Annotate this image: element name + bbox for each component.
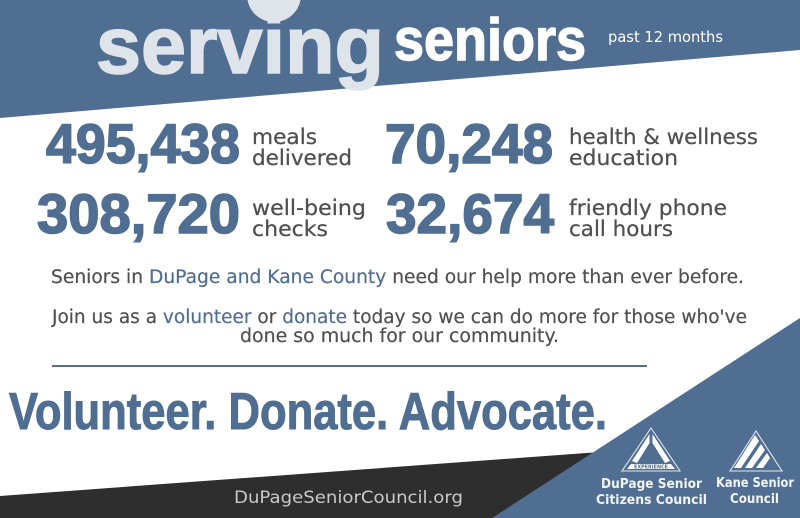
logo: DuPage triangle [622,428,680,471]
label: DuPage Senior Citizens Council [596,477,707,508]
icon: head circle [247,0,301,22]
text block: seniors need help: Seniors in DuPage and Kane County need our help more than ever before. [51,267,744,288]
stat: meals delivered: 495,438 [46,112,240,175]
stat: friendly phone call hours: friendly phone [569,196,727,221]
stat: well-being checks [37,182,366,245]
label: Kane Senior Council: Council [730,492,779,507]
title: serving: serving [96,1,384,91]
text block: join us [51,307,747,347]
panel: dark footer [0,452,600,518]
heading: call to action: Volunteer. Donate. Advocate. [9,383,607,441]
stat: meals delivered [46,112,352,175]
text block: join us: done so much for our community. [240,326,559,347]
stat: meals delivered: meals [252,125,317,150]
website url: DuPageSeniorCouncil.org [234,488,463,508]
stat: friendly phone call hours [386,182,727,245]
label: DuPage Senior Citizens Council: Citizens Council [596,493,707,508]
stat: health and wellness education: 70,248 [385,112,553,175]
logo: DuPage triangle: EXPERIENCE [634,464,669,470]
logo: Kane triangle [730,431,782,471]
stat: well-being checks: well-being [252,196,366,221]
panel: top banner [0,0,800,118]
stat: meals delivered: delivered [252,146,352,171]
label: Kane Senior Council [716,476,795,507]
stat: friendly phone call hours: 32,674 [386,182,554,245]
stat: well-being checks: 308,720 [37,182,240,245]
panel: bottom right corner [492,318,800,518]
stat: health and wellness education: health & wellness [569,125,758,150]
stat: health and wellness education [385,112,758,175]
subtitle: past 12 months: past 12 months [608,28,723,46]
title: seniors: seniors [394,7,586,73]
stat: well-being checks: checks [252,217,328,242]
text block: join us: Join us as a volunteer or donate today so we can do more for those who've [51,307,747,328]
label: DuPage Senior Citizens Council: DuPage Senior [601,477,703,492]
stat: friendly phone call hours: call hours [569,217,673,242]
stat: health and wellness education: education [569,146,678,171]
